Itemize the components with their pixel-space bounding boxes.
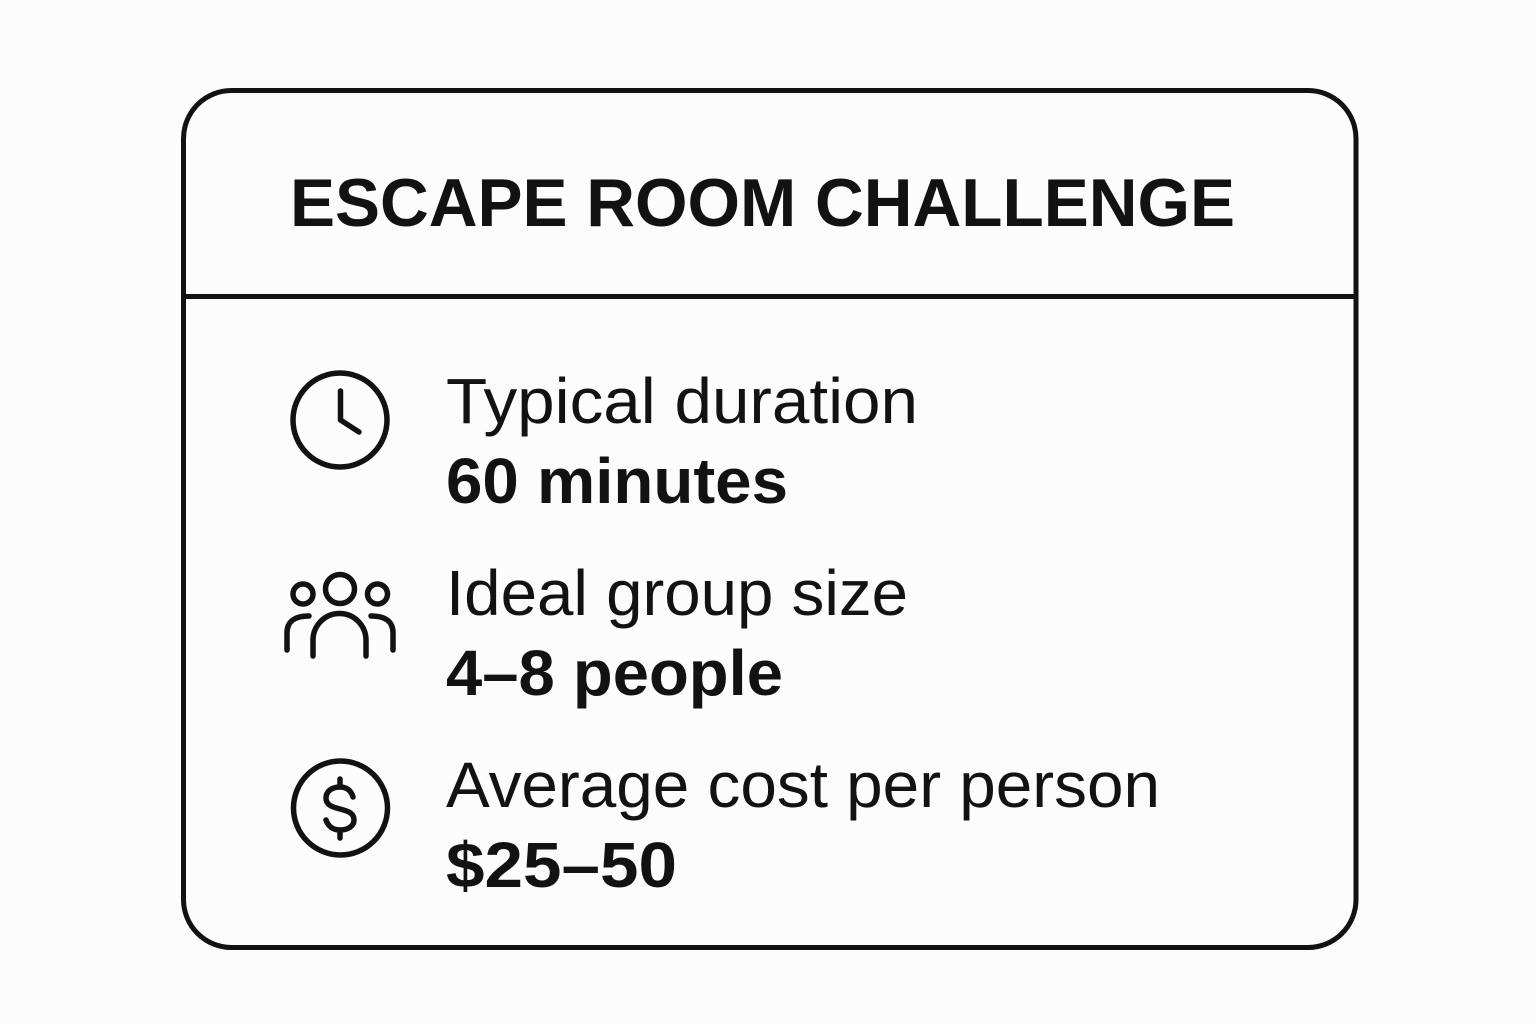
text block: typical duration <box>446 365 918 517</box>
value: 4–8 people: 4–8 people <box>446 637 783 709</box>
panel: card outline <box>184 90 1356 948</box>
value: 60 minutes: 60 minutes <box>446 445 788 517</box>
text block: average cost per person <box>446 749 1160 901</box>
text block: ideal group size <box>446 557 908 709</box>
icon: dollar coin <box>294 761 388 855</box>
value: $25–50: $25–50 <box>446 829 677 901</box>
icon: group of people <box>287 574 393 656</box>
label: average cost per person: Average cost per person <box>446 749 1160 821</box>
icon: clock <box>293 373 387 467</box>
label: typical duration: Typical duration <box>446 365 918 437</box>
label: ideal group size: Ideal group size <box>446 557 908 629</box>
title: ESCAPE ROOM CHALLENGE <box>290 165 1235 241</box>
